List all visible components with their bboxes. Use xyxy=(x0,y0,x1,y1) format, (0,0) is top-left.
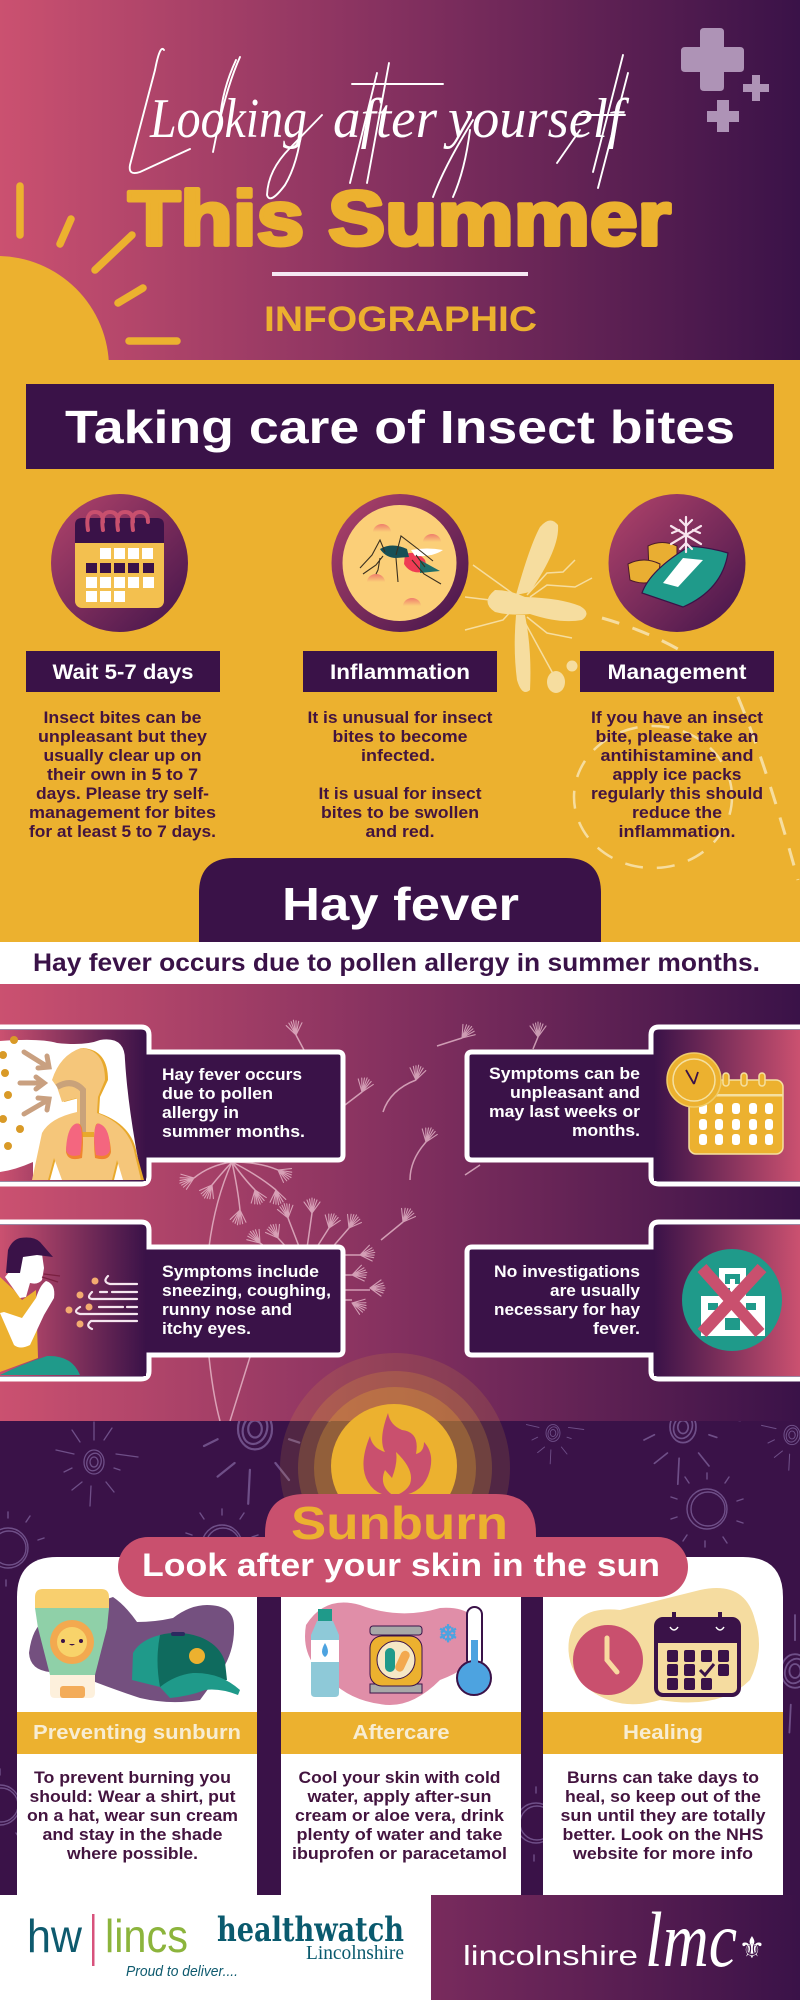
text: management: apply ice packs xyxy=(612,766,742,784)
title bar: taking care of insect bites xyxy=(26,384,774,469)
label: management: Management xyxy=(608,661,747,684)
text: better. Look on the NHS xyxy=(562,1826,764,1844)
logo: healthwatch lincolnshire: healthwatch xyxy=(217,1910,404,1950)
text: on a hat, wear sun cream xyxy=(27,1807,238,1825)
strip: aftercare xyxy=(281,1712,521,1754)
text: wait 5-7 days: days. Please try self- xyxy=(36,785,209,803)
column: healing xyxy=(543,1557,783,1895)
icon: person breathing pollen xyxy=(0,1036,144,1180)
text: Symptoms can be xyxy=(489,1065,640,1083)
text: inflammation xyxy=(308,709,493,841)
text: management: inflammation. xyxy=(618,823,736,841)
title: looking after yourself xyxy=(130,49,630,198)
logo: healthwatch lincolnshire xyxy=(217,1910,404,1964)
title: looking after yourself: after xyxy=(333,88,437,150)
text: management xyxy=(591,709,764,841)
footer: lincolnshire lmc: lmc xyxy=(645,1896,737,1983)
footer: lincolnshire lmc: lincolnshire xyxy=(463,1940,638,1971)
title: looking after yourself: Looking xyxy=(149,88,307,150)
text: management: If you have an insect xyxy=(591,709,764,727)
text: wait 5-7 days: for at least 5 to 7 days. xyxy=(29,823,216,841)
icon: mosquito on skin xyxy=(332,494,468,632)
label: inflammation xyxy=(303,651,497,692)
text: wait 5-7 days xyxy=(29,709,216,841)
text: Cool your skin with cold xyxy=(298,1769,500,1787)
text xyxy=(292,1769,507,1863)
text: inflammation: It is usual for insect xyxy=(318,785,482,803)
text: are usually xyxy=(550,1282,641,1300)
heading tab: hay fever: Hay fever xyxy=(282,878,519,930)
footer: lincolnshire lmc xyxy=(431,1895,800,2000)
text: sneezing, coughing, xyxy=(162,1282,331,1300)
panel: hay fever background xyxy=(0,984,800,1421)
heading tab: hay fever xyxy=(199,858,601,942)
text: Burns can take days to xyxy=(567,1769,759,1787)
illustration: clock and calendar xyxy=(568,1588,759,1704)
text: necessary for hay xyxy=(494,1301,641,1319)
text: cream or aloe vera, drink xyxy=(295,1807,505,1825)
text: runny nose and xyxy=(162,1301,292,1319)
text: inflammation: infected. xyxy=(361,747,435,765)
text: wait 5-7 days: Insect bites can be xyxy=(44,709,202,727)
illustration: water, pills and thermometer xyxy=(305,1602,491,1705)
text xyxy=(162,1263,331,1338)
text: summer months. xyxy=(162,1123,305,1141)
text: management: antihistamine and xyxy=(600,747,754,765)
footer: partner logos xyxy=(0,1895,431,2000)
icon: person coughing xyxy=(0,1238,137,1375)
icon: sun with rays xyxy=(0,186,177,480)
logo: hw lincs: Proud to deliver.... xyxy=(126,1963,238,1980)
background mosquito xyxy=(465,520,798,880)
divider line xyxy=(272,272,528,276)
column: aftercare xyxy=(281,1557,521,1895)
text: fever. xyxy=(593,1320,640,1338)
icon: crossed-out hospital xyxy=(682,1249,782,1351)
label: management xyxy=(580,651,774,692)
text: water, apply after-sun xyxy=(306,1788,492,1806)
text: ibuprofen or paracetamol xyxy=(292,1845,507,1863)
strip: healing: Healing xyxy=(623,1722,703,1744)
text: wait 5-7 days: unpleasant but they xyxy=(38,728,208,746)
heading pill: sunburn xyxy=(265,1494,536,1549)
text: management: reduce the xyxy=(632,804,722,822)
text: and stay in the shade xyxy=(42,1826,222,1844)
footer: lincolnshire lmc: ⚜ xyxy=(739,1931,765,1966)
text: itchy eyes. xyxy=(162,1320,251,1338)
column: preventing sunburn xyxy=(17,1557,257,1895)
icon: ice pack and snowflake xyxy=(608,494,746,632)
text: unpleasant and xyxy=(510,1084,640,1102)
text: management: regularly this should xyxy=(591,785,763,803)
title: this summer: This Summer xyxy=(128,176,671,262)
card: symptoms xyxy=(0,1222,343,1379)
label: wait 5-7 days xyxy=(26,651,220,692)
text: months. xyxy=(572,1122,640,1140)
text xyxy=(560,1769,766,1863)
text: To prevent burning you xyxy=(34,1769,231,1787)
illustration: sun cream and cap xyxy=(29,1589,240,1702)
band: hay fever summary: Hay fever occurs due to pollen allergy in summer months. xyxy=(33,949,760,977)
text: due to pollen xyxy=(162,1085,273,1103)
band: hay fever summary xyxy=(0,942,800,984)
text: where possible. xyxy=(66,1845,198,1863)
panel: insect bites background xyxy=(0,360,800,942)
text: Hay fever occurs xyxy=(162,1066,302,1084)
label: inflammation: Inflammation xyxy=(330,661,470,684)
strip: healing xyxy=(543,1712,783,1754)
logo: hw lincs: hw xyxy=(27,1910,83,1962)
text: inflammation: It is unusual for insect xyxy=(308,709,493,727)
icon: clock and calendar xyxy=(667,1053,783,1154)
icon: medical crosses xyxy=(681,28,769,132)
text: plenty of water and take xyxy=(296,1826,502,1844)
label: wait 5-7 days: Wait 5-7 days xyxy=(52,661,194,684)
text: management: bite, please take an xyxy=(596,728,758,746)
title bar: taking care of insect bites: Taking care of Insect bites xyxy=(65,401,735,453)
logo: hw lincs: lincs xyxy=(105,1910,188,1962)
text xyxy=(494,1263,641,1338)
heading pill: look after your skin xyxy=(118,1537,688,1597)
text: inflammation: and red. xyxy=(366,823,434,841)
text: website for more info xyxy=(572,1845,753,1863)
strip: preventing sunburn xyxy=(17,1712,257,1754)
text xyxy=(162,1066,305,1141)
text: wait 5-7 days: management for bites xyxy=(29,804,216,822)
text: should: Wear a shirt, put xyxy=(30,1788,236,1806)
icon: calendar xyxy=(51,494,188,632)
text: Symptoms include xyxy=(162,1263,319,1281)
card: no investigations xyxy=(467,1222,800,1379)
text: sun until they are totally xyxy=(560,1807,766,1825)
text: may last weeks or xyxy=(489,1103,641,1121)
text: allergy in xyxy=(162,1104,239,1122)
text: wait 5-7 days: their own in 5 to 7 xyxy=(47,766,198,784)
text: No investigations xyxy=(494,1263,640,1281)
text xyxy=(27,1769,238,1863)
subtitle: infographic: INFOGRAPHIC xyxy=(264,300,537,339)
logo: healthwatch lincolnshire: Lincolnshire xyxy=(306,1942,404,1964)
panel: sunburn background xyxy=(0,1421,800,1895)
text xyxy=(489,1065,641,1140)
icon: flame in glowing sun xyxy=(280,1353,510,1583)
header background xyxy=(0,0,800,360)
text: wait 5-7 days: usually clear up on xyxy=(44,747,202,765)
strip: preventing sunburn: Preventing sunburn xyxy=(33,1722,241,1744)
title: looking after yourself: yourself xyxy=(443,88,630,150)
background sun doodles xyxy=(0,1421,800,1862)
heading pill: sunburn: Sunburn xyxy=(291,1497,508,1549)
illustration: water, pills and thermometer: ❄ xyxy=(438,1621,458,1648)
text: inflammation: bites to be swollen xyxy=(321,804,479,822)
logo: hw lincs xyxy=(27,1910,238,1980)
strip: aftercare: Aftercare xyxy=(352,1722,450,1744)
heading pill: look after your skin: Look after your skin in the sun xyxy=(142,1547,660,1583)
card: symptom duration xyxy=(467,1027,800,1184)
card: hay fever causes xyxy=(0,1027,343,1184)
text: inflammation: bites to become xyxy=(332,728,468,746)
background dandelions xyxy=(177,1019,546,1421)
text: heal, so keep out of the xyxy=(565,1788,761,1806)
